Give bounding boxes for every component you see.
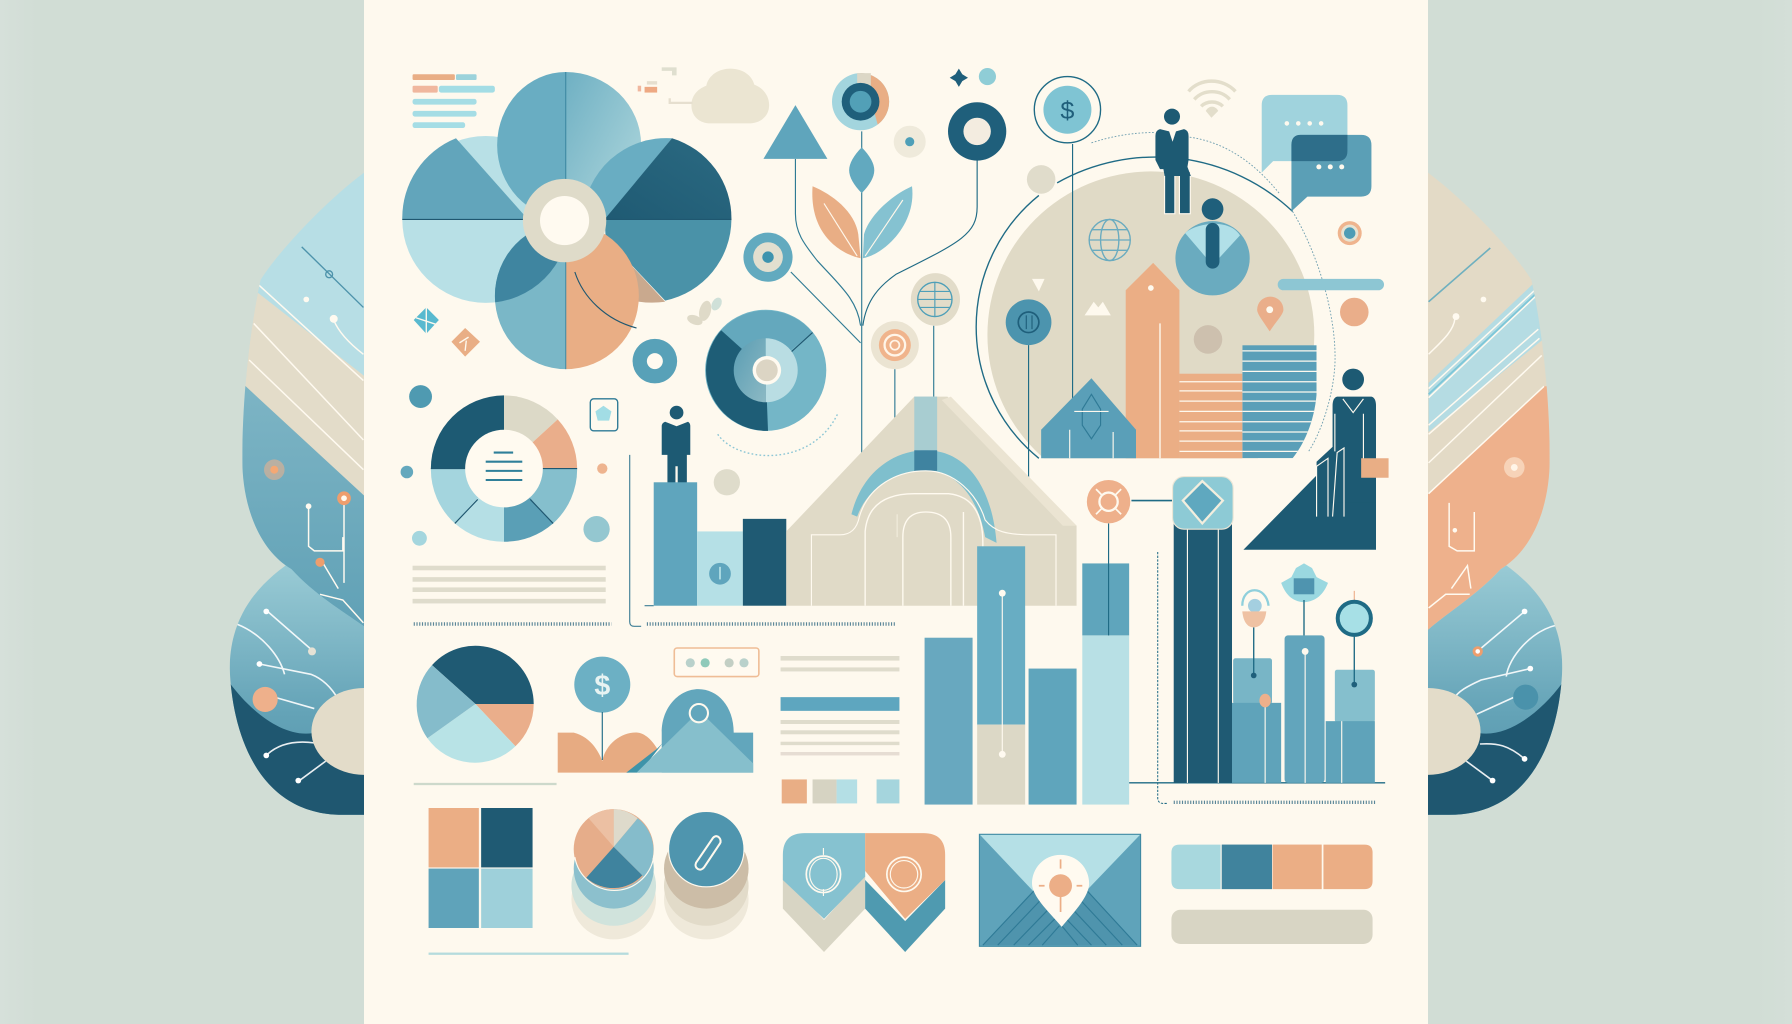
blue house	[1041, 378, 1136, 458]
orange hills	[558, 732, 657, 773]
main bar chart	[925, 546, 1129, 805]
bar axis left	[630, 455, 654, 626]
small connector marks near cloud	[638, 67, 693, 103]
right chart axis	[1129, 552, 1385, 803]
blue leaf	[863, 186, 912, 258]
shield left	[783, 833, 865, 952]
left lower blob	[230, 566, 364, 815]
right petal	[583, 138, 731, 303]
teal arch	[662, 689, 753, 773]
left decorative blobs	[230, 173, 364, 815]
donut chart sectors	[705, 310, 826, 431]
bud leaf	[849, 147, 874, 193]
orange location pin	[1257, 297, 1283, 331]
pie chart bottom left	[417, 646, 534, 763]
dark ring	[948, 102, 1006, 161]
seated person with briefcase	[1243, 369, 1389, 550]
diamond icons	[414, 307, 480, 357]
dollar flower and hills	[558, 657, 753, 773]
vertical strip	[914, 397, 937, 454]
teal sliver	[626, 743, 663, 773]
right upper blob	[1428, 173, 1550, 630]
grey pill	[1171, 910, 1373, 944]
wifi icon	[1189, 81, 1235, 118]
person on bar	[662, 406, 690, 489]
small dots around donut	[401, 385, 740, 546]
flower pie chart	[402, 72, 731, 369]
cloud icon	[691, 69, 769, 123]
orange and taupe circles	[1194, 298, 1369, 354]
ring lollipop marker	[1338, 591, 1371, 687]
connector	[1131, 500, 1174, 502]
tiny axis label rows	[414, 624, 1376, 802]
leaves	[812, 147, 912, 258]
colour swatches	[782, 779, 899, 803]
shield right	[865, 833, 945, 952]
ring left of stem	[743, 233, 793, 282]
dollar line	[1072, 144, 1074, 400]
bubble overlap	[1291, 135, 1347, 161]
rule under pie	[414, 783, 557, 785]
globe marker	[911, 273, 960, 326]
plant stem diagram	[791, 131, 977, 480]
left petal light circle	[402, 136, 569, 303]
outer arc	[976, 195, 1039, 458]
speech bubbles	[1262, 95, 1371, 211]
centre cream panel	[364, 0, 1428, 1024]
framed diamond icon	[590, 399, 618, 431]
dollar badge: $	[1060, 97, 1074, 125]
envelope with pin	[979, 834, 1141, 946]
teal coin marker	[1006, 299, 1051, 478]
small beige ring	[894, 126, 926, 158]
small ring teal	[633, 339, 677, 383]
small orange pin	[1259, 694, 1271, 707]
left upper blob	[242, 173, 364, 626]
orange target badge	[1087, 480, 1130, 523]
left text lines	[413, 566, 606, 603]
seated person	[1155, 109, 1191, 214]
large beige scene circle	[976, 132, 1336, 459]
right decorative blobs	[1428, 173, 1562, 815]
small legend bars top-left	[413, 74, 495, 128]
triangle arrow	[763, 105, 827, 159]
orange stacked lines	[1179, 374, 1242, 458]
stacked pie discs	[571, 809, 656, 939]
text lines right of hills	[781, 656, 899, 755]
sparkle and dot	[950, 68, 996, 87]
dark tall column	[1174, 520, 1232, 783]
dollar coin	[574, 657, 630, 713]
left petal upper wedge	[402, 138, 528, 219]
stem to bar	[1108, 523, 1110, 635]
top circle on stem	[832, 73, 889, 130]
label bar	[1278, 279, 1384, 290]
arch band	[851, 450, 997, 543]
dotted arc	[718, 414, 838, 456]
right lower blob	[1428, 566, 1562, 815]
lotus icon on stem	[1281, 563, 1328, 635]
stacked paperclip discs	[664, 811, 749, 939]
orange tower chart	[1126, 263, 1179, 458]
light bubble	[1262, 95, 1347, 173]
top petal	[497, 72, 641, 218]
quad squares	[429, 808, 533, 928]
beige arch building	[786, 397, 1077, 606]
dark bubble	[1291, 135, 1371, 211]
dollar flower and hills: $	[594, 670, 610, 702]
arch keystone	[914, 450, 937, 471]
small ring right	[1338, 221, 1362, 245]
dots label box	[674, 648, 759, 677]
centre ring	[523, 179, 606, 262]
blue pie with pointer	[1175, 198, 1250, 295]
outer arc top	[1057, 157, 1293, 211]
light triangle	[637, 711, 753, 773]
orange target marker	[871, 321, 919, 369]
globe icon	[1089, 219, 1130, 261]
dotted arc	[1293, 211, 1335, 451]
small sprig icon	[686, 296, 724, 327]
rainbow icon on stem	[1242, 590, 1269, 678]
small grouped bars	[1232, 635, 1375, 783]
beige small circle	[1027, 165, 1055, 194]
bottom petal	[494, 234, 639, 370]
orange leaf	[812, 186, 861, 258]
small bar chart	[654, 482, 786, 606]
rule under discs	[429, 953, 629, 955]
blue stacked lines	[1242, 345, 1318, 458]
diamond badge	[1173, 477, 1233, 529]
right beige circle	[1375, 688, 1481, 775]
left beige circle	[311, 688, 417, 775]
small triangle and mountain glyphs	[1032, 279, 1111, 315]
arch inner lines	[811, 471, 1056, 606]
ring donut chart with list	[431, 395, 577, 542]
segmented pill	[1171, 845, 1373, 889]
dollar badge	[1034, 77, 1101, 143]
